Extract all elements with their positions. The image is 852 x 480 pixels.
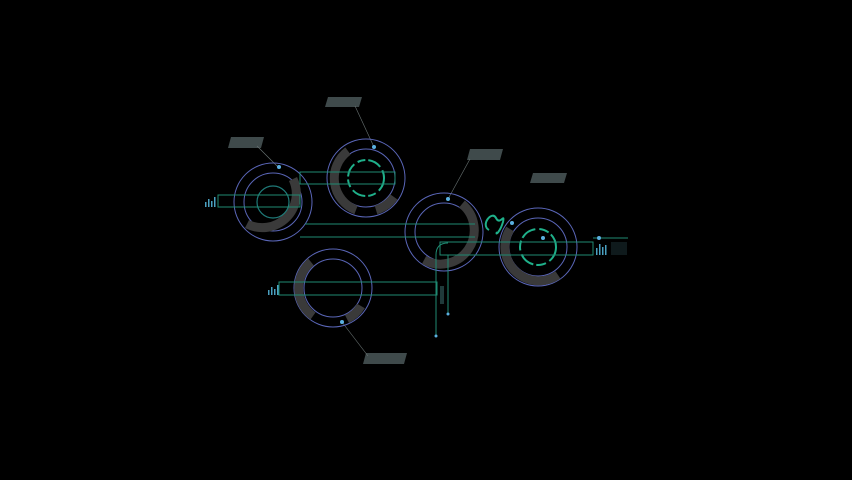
connector bars: [218, 172, 628, 336]
label boxes: [228, 97, 567, 364]
bar icons: [205, 197, 606, 295]
leader lines: [257, 106, 470, 356]
circles: [234, 139, 577, 327]
dots: [277, 145, 601, 338]
